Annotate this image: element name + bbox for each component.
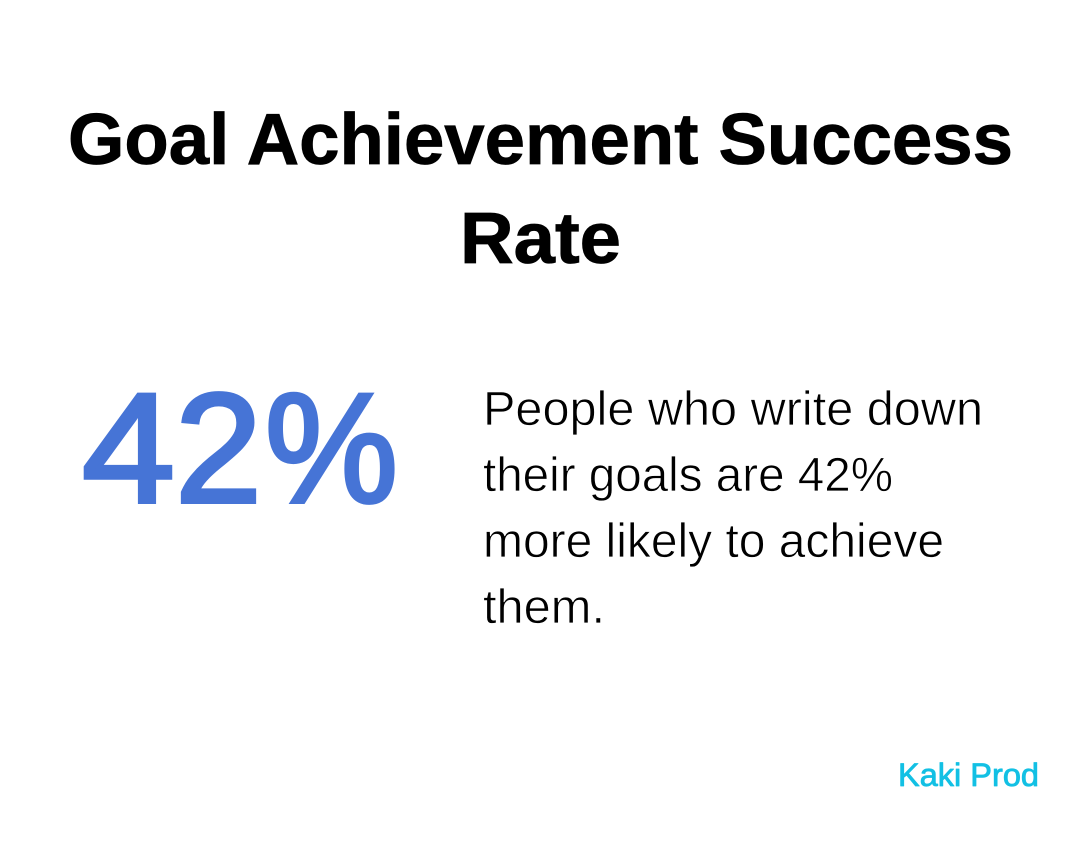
big statistic: 42% (82, 362, 398, 536)
big statistic: 42%: 2 (175, 362, 262, 536)
big statistic: 42%: 4 (82, 362, 175, 536)
title (68, 100, 1013, 279)
big statistic: 42%: % (265, 362, 398, 536)
title: Rate (460, 199, 621, 279)
logo: Kaki Prod: Kaki Prod (898, 757, 1039, 793)
description text: them. (483, 581, 605, 634)
description text (483, 383, 983, 634)
description text: more likely to achieve (483, 515, 944, 568)
description text: People who write down (483, 383, 983, 436)
title: Goal Achievement Success (68, 100, 1013, 180)
description text: their goals are 42% (483, 449, 893, 502)
